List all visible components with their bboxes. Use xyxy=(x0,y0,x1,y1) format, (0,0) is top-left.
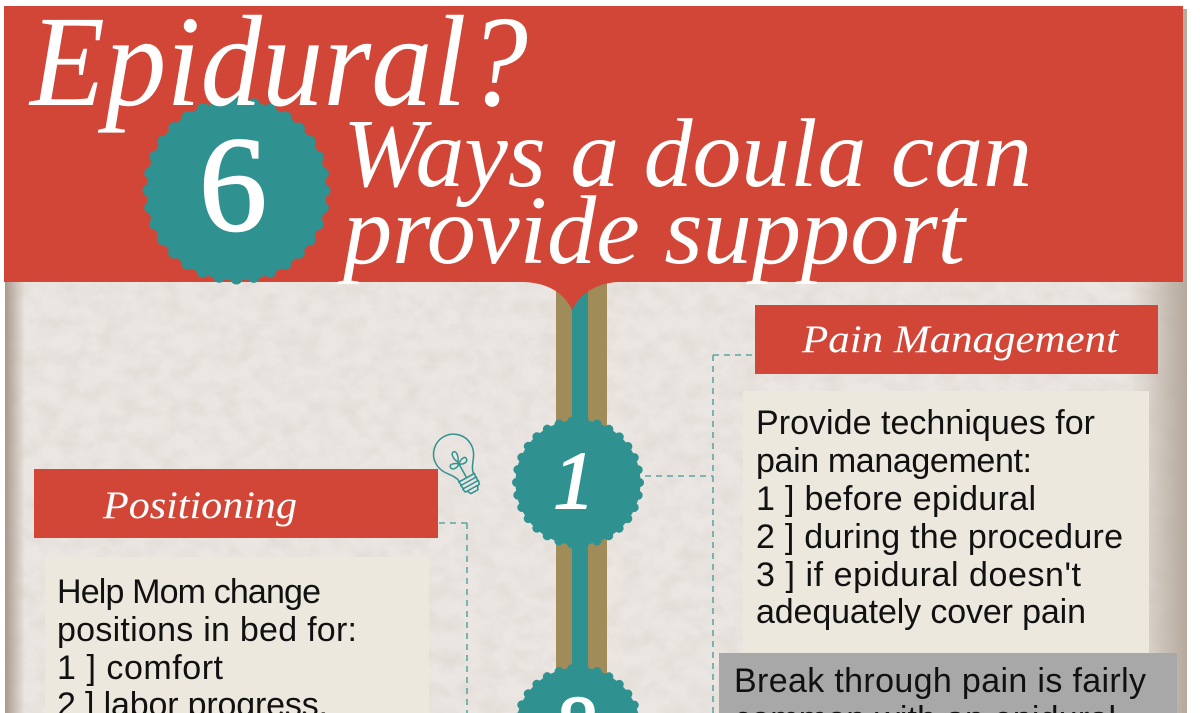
panel: pain management text: pain management: xyxy=(756,442,1032,480)
panel: pain management text xyxy=(743,391,1149,653)
panel: pain management text: 1 ] before epidural xyxy=(756,480,1036,518)
dashed connector: step 1 to pain management xyxy=(645,355,755,713)
timeline column xyxy=(556,282,607,713)
dashed connector: positioning to step 1 xyxy=(439,523,467,713)
subtitle xyxy=(337,100,1032,284)
panel: positioning text: 1 ] comfort xyxy=(57,649,224,687)
callout: break through pain: Break through pain is fairly xyxy=(734,662,1146,700)
badge: number 2 partially visible xyxy=(516,668,640,713)
callout: break through pain xyxy=(719,653,1177,713)
badge: number 6 xyxy=(146,100,326,280)
badge: number 1: 1 xyxy=(554,435,594,526)
panel: pain management text: adequately cover pain xyxy=(756,593,1086,631)
panel: positioning text: Help Mom change xyxy=(57,573,321,611)
panel: positioning heading xyxy=(34,469,438,538)
subtitle: Ways a doula can xyxy=(343,100,1032,207)
panel: pain management text: 3 ] if epidural doesn't xyxy=(756,556,1082,594)
panel: pain management text: Provide techniques for xyxy=(756,404,1095,442)
badge: number 1 xyxy=(516,420,640,545)
panel: pain management text: 2 ] during the procedure xyxy=(756,518,1123,556)
header banner xyxy=(4,6,1183,310)
panel: positioning heading: Positioning xyxy=(102,484,297,527)
badge: number 6: 6 xyxy=(199,110,267,260)
panel: pain management heading xyxy=(755,305,1158,374)
panel: pain management heading: Pain Management xyxy=(801,318,1119,361)
icon: lightbulb xyxy=(426,427,492,501)
panel: positioning text xyxy=(45,557,429,713)
subtitle: provide support xyxy=(337,177,967,284)
panel: positioning text: positions in bed for: xyxy=(57,611,357,649)
